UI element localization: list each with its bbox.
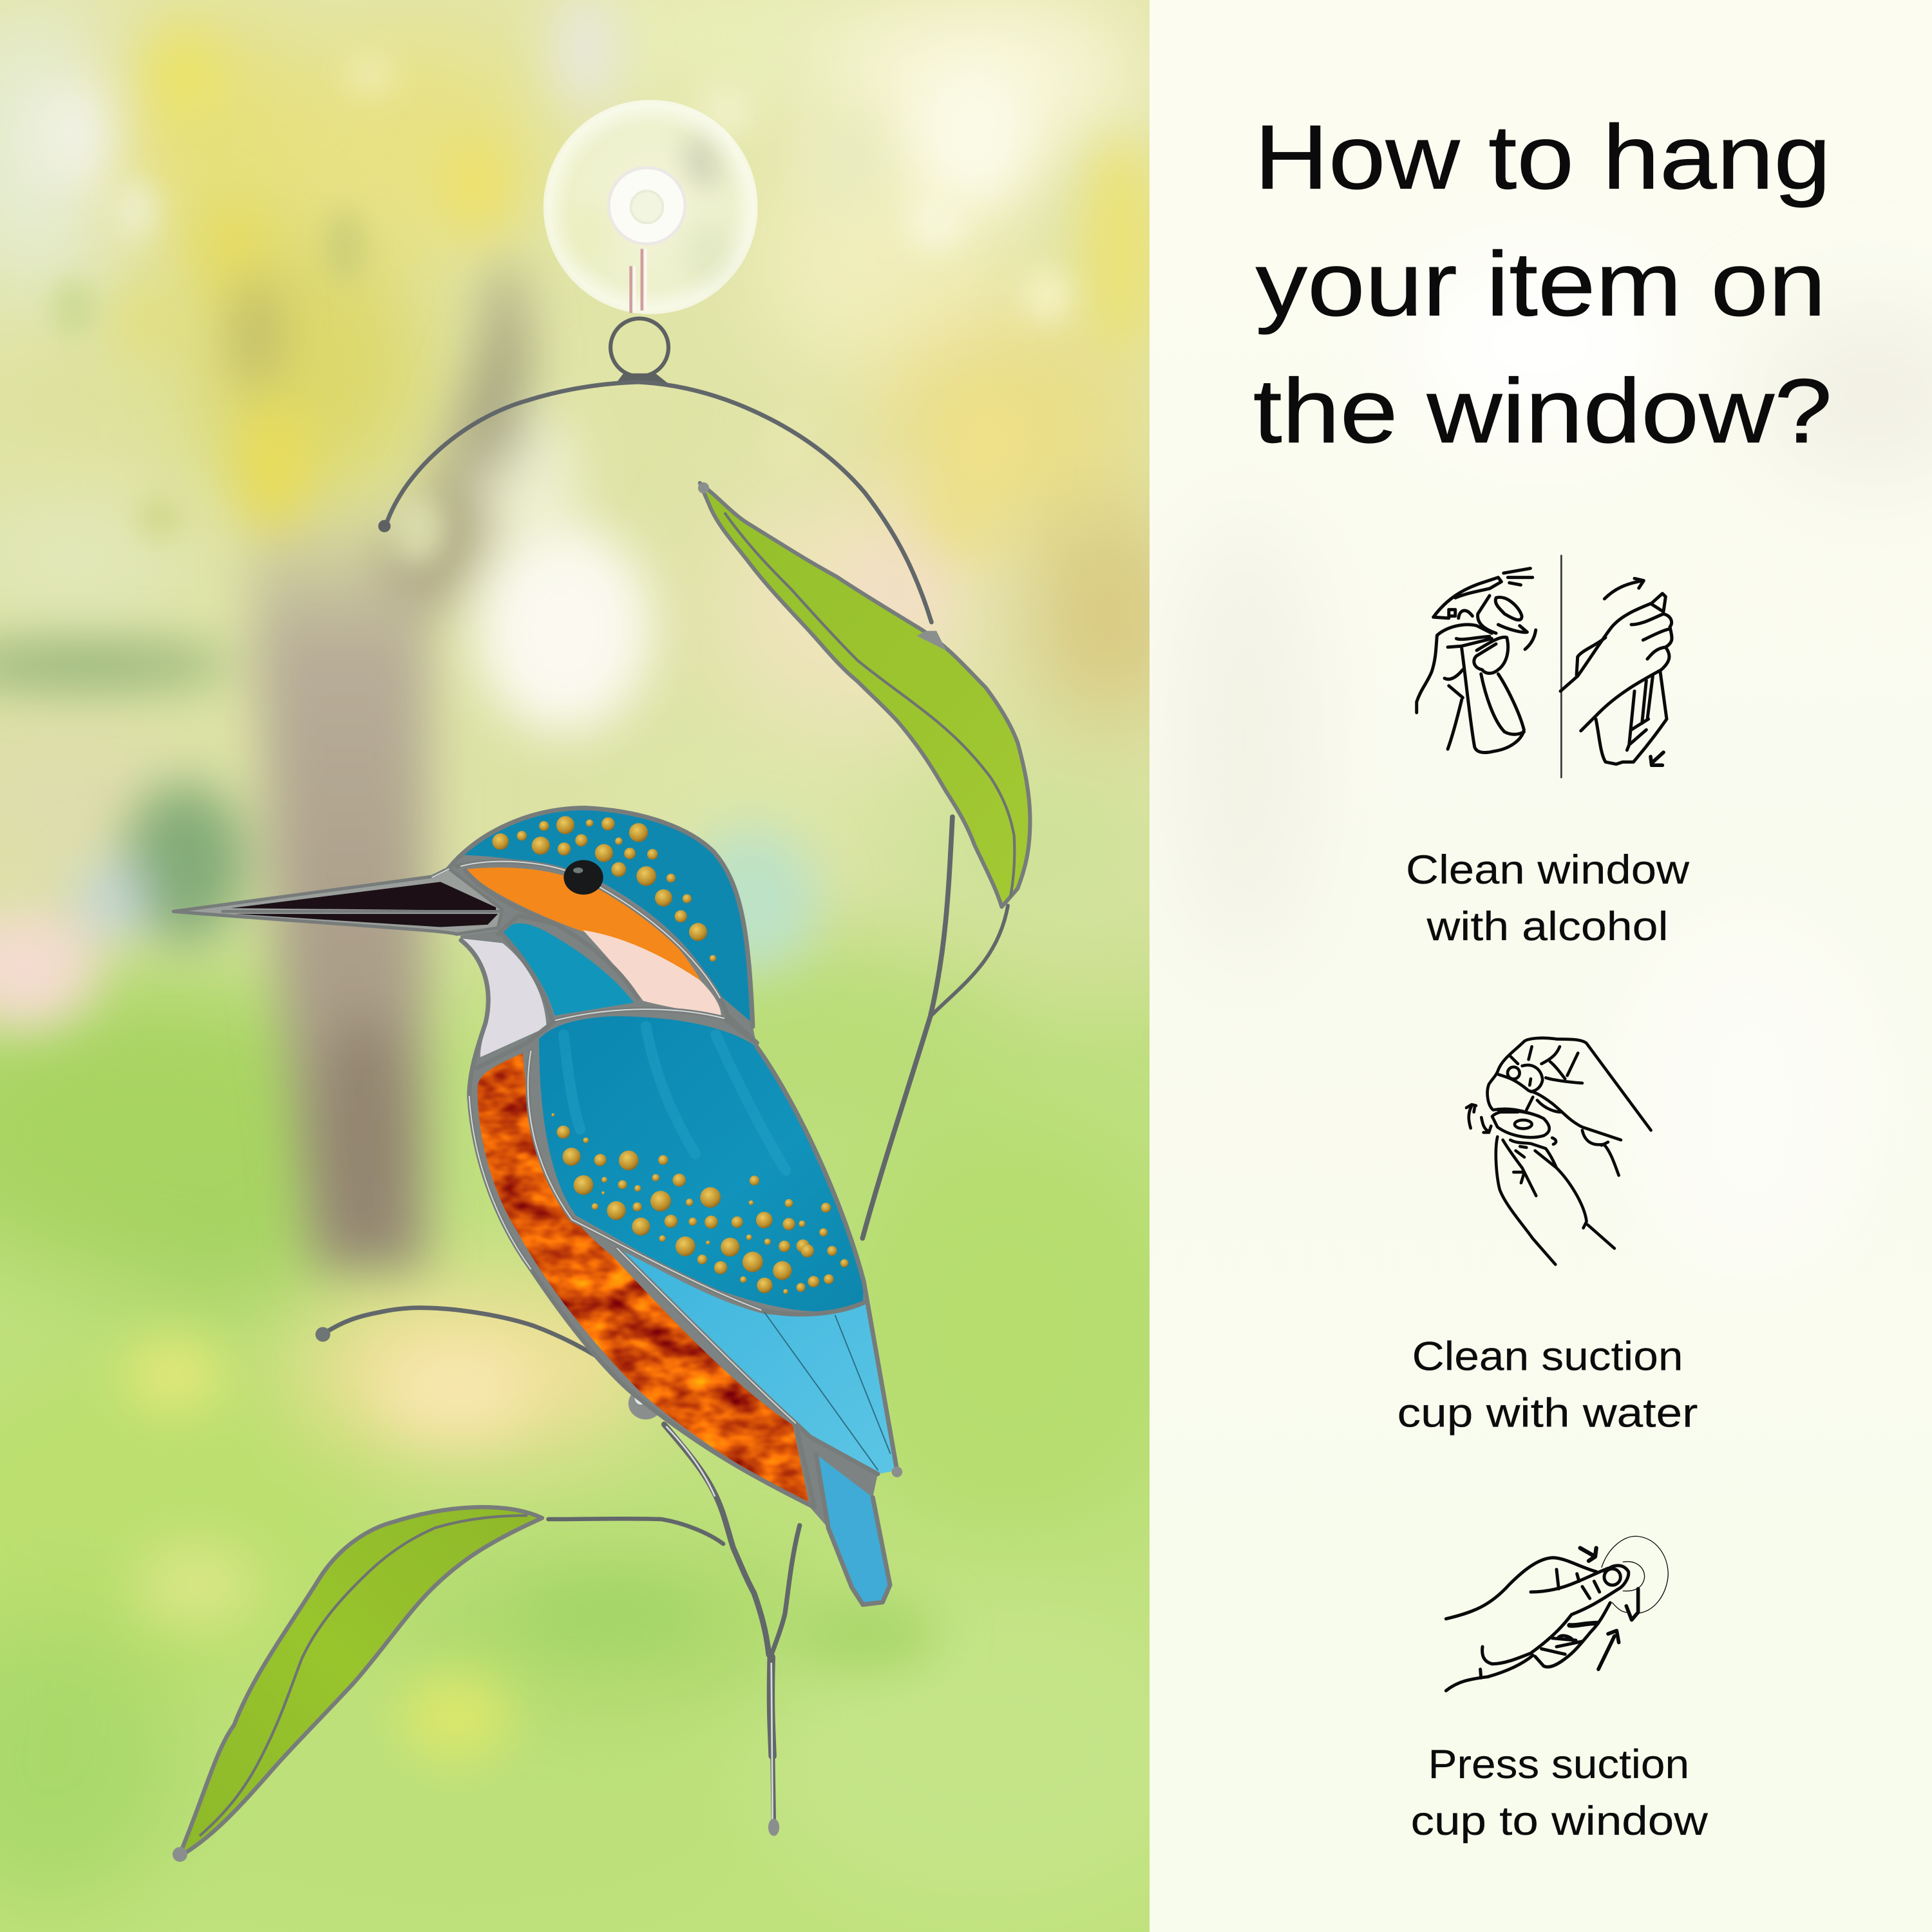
- upper stem: [862, 817, 1008, 1238]
- panel: blurred garden photo background: [0, 0, 1220, 1932]
- white throat: [465, 940, 545, 1056]
- hanging wire arc: [378, 382, 931, 622]
- lower branch and perch: [316, 1308, 800, 1836]
- suction cup with hook: [544, 100, 758, 383]
- beak: [173, 870, 502, 936]
- icon: hand pressing suction cup: [1446, 1536, 1668, 1690]
- text: press suction cup: cup to window: [1411, 1799, 1708, 1844]
- text: clean suction cup: [1397, 1334, 1698, 1436]
- text: press suction cup: Press suction: [1428, 1742, 1689, 1787]
- title: the window?: [1253, 361, 1832, 462]
- icon: spray bottle and cloth: [1417, 555, 1672, 778]
- panel: right instructions background: [1150, 0, 1932, 1932]
- light blue wing: [622, 1251, 897, 1474]
- upper green leaf: [698, 482, 1030, 907]
- text: clean window: [1406, 848, 1690, 949]
- title: How to hang: [1255, 107, 1831, 209]
- eye: [564, 860, 603, 895]
- lead highlights: [432, 862, 795, 1423]
- wing tip solder knob: [892, 1466, 902, 1477]
- kingfisher bird: [173, 808, 902, 1605]
- icon: hands cleaning suction cup: [1466, 1038, 1651, 1264]
- tail: [816, 1454, 890, 1605]
- bird crown: [467, 811, 749, 1018]
- wing feather lines: [764, 1312, 891, 1470]
- blue body: [539, 1016, 864, 1311]
- orange face patch: [467, 869, 697, 977]
- title: your item on: [1256, 234, 1826, 336]
- bird lead silhouette: [449, 808, 897, 1605]
- text: clean window: Clean window: [1406, 848, 1690, 893]
- cream ear patch: [586, 932, 720, 1016]
- lower green leaf: [173, 1507, 542, 1862]
- title: [1253, 107, 1832, 462]
- orange breast: [469, 1047, 822, 1511]
- text: clean window: with alcohol: [1426, 904, 1669, 949]
- text: clean suction cup: cup with water: [1397, 1391, 1698, 1436]
- text: clean suction cup: Clean suction: [1412, 1334, 1683, 1379]
- lead lines: [173, 808, 897, 1605]
- text: press suction cup: [1411, 1742, 1708, 1844]
- blue cheek: [502, 925, 632, 1014]
- gold dots: [492, 816, 849, 1294]
